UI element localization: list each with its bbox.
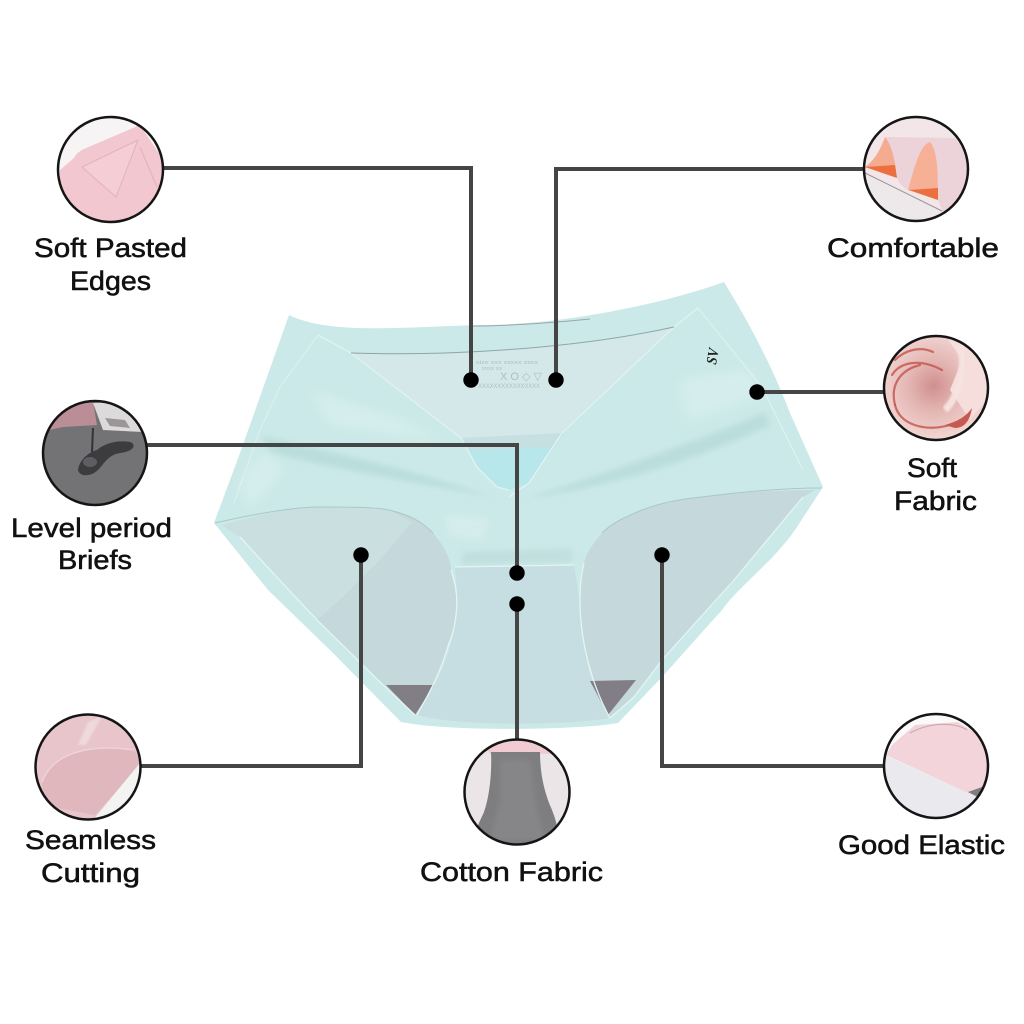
label: Cotton Fabric: Cotton Fabric	[420, 857, 603, 887]
label: Comfortable: Comfortable	[827, 233, 999, 263]
icon: good elastic band	[882, 712, 990, 820]
label: Level period Briefs	[11, 513, 172, 575]
connector: Level period Briefs	[147, 445, 525, 581]
label: Seamless Cutting	[25, 825, 156, 888]
connector: Comfortable	[548, 169, 864, 388]
icon: comfortable elastic waves	[860, 112, 972, 225]
connector: Cotton Fabric	[509, 596, 525, 739]
briefs body	[214, 282, 823, 729]
edge seams	[234, 308, 803, 718]
icon: soft pasted edge detail	[55, 115, 170, 225]
care label print	[476, 360, 543, 390]
crotch panel	[417, 565, 610, 724]
label: Soft Pasted Edges: Edges	[70, 266, 151, 296]
label: Soft Fabric: Soft	[907, 453, 958, 483]
label: Seamless Cutting: Cutting	[41, 858, 140, 888]
connector: Soft Pasted Edges	[163, 168, 479, 388]
label: Soft Pasted Edges	[34, 233, 187, 296]
right leg opening	[580, 490, 815, 718]
icon: cotton fabric gusset	[463, 738, 571, 846]
logo mark: SV	[704, 345, 723, 366]
care label print: xxxx xx	[482, 366, 503, 372]
grey cotton triangles	[386, 685, 434, 715]
fabric highlights	[326, 402, 396, 428]
label: Level period Briefs: Briefs	[58, 545, 132, 575]
connector: Soft Fabric	[749, 384, 884, 400]
care label print: X O ◇ ▽	[500, 371, 543, 383]
gusset creases	[464, 551, 570, 562]
icon: soft fabric swirl	[880, 332, 992, 444]
label: Soft Fabric: Fabric	[894, 486, 977, 516]
connector: Good Elastic	[654, 547, 884, 766]
icon: level period liquid on cotton	[40, 398, 150, 508]
product: light blue seamless briefs	[214, 282, 823, 729]
label: Seamless Cutting: Seamless	[25, 825, 156, 855]
label: Good Elastic: Good Elastic	[838, 830, 1005, 860]
fold shadows	[265, 438, 462, 490]
icon: seamless cutting edge	[32, 710, 145, 822]
label: Level period Briefs: Level period	[11, 513, 172, 543]
inner back panel	[351, 327, 674, 438]
connector: Seamless Cutting	[140, 547, 369, 766]
inner blue lining	[467, 435, 562, 490]
care label print: XXXXXXXXXXXXXXXX	[478, 384, 540, 390]
care label print: size xxx xxxxx xxxx	[476, 360, 538, 366]
label: Soft Fabric	[894, 453, 977, 516]
label: Soft Pasted Edges: Soft Pasted	[34, 233, 187, 263]
waistband and leg seam lines	[215, 319, 822, 533]
left leg opening	[318, 512, 456, 714]
